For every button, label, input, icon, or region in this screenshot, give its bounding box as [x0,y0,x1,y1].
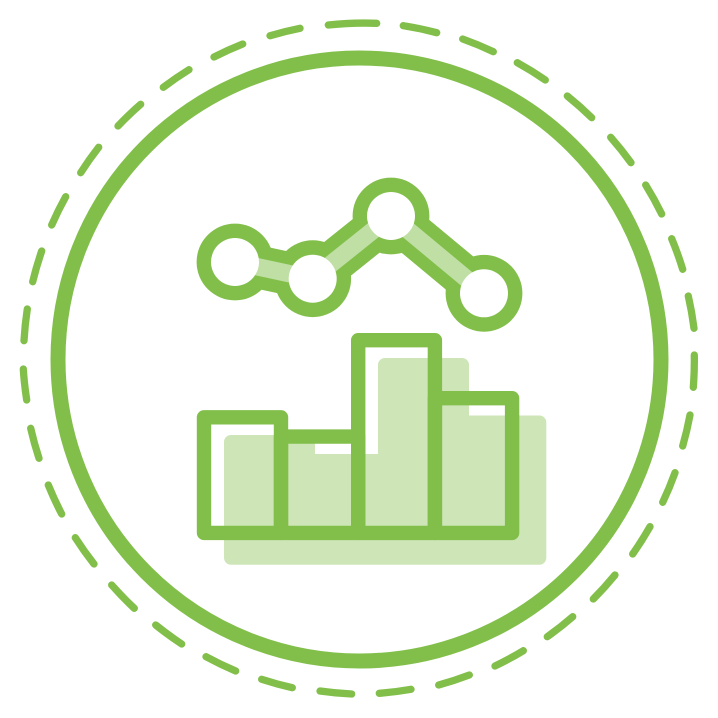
bar 1 [204,417,281,533]
data point centres [211,192,508,317]
line connector highlight [235,216,484,293]
data point rings [197,178,522,332]
line chart [197,178,522,332]
shadow bars [224,358,546,565]
bar 4 [435,398,512,533]
bar 2 [281,437,358,533]
bar 3 [358,340,435,533]
solid inner ring [58,58,661,661]
bar chart outline [204,340,512,533]
line connector outline [235,216,484,293]
